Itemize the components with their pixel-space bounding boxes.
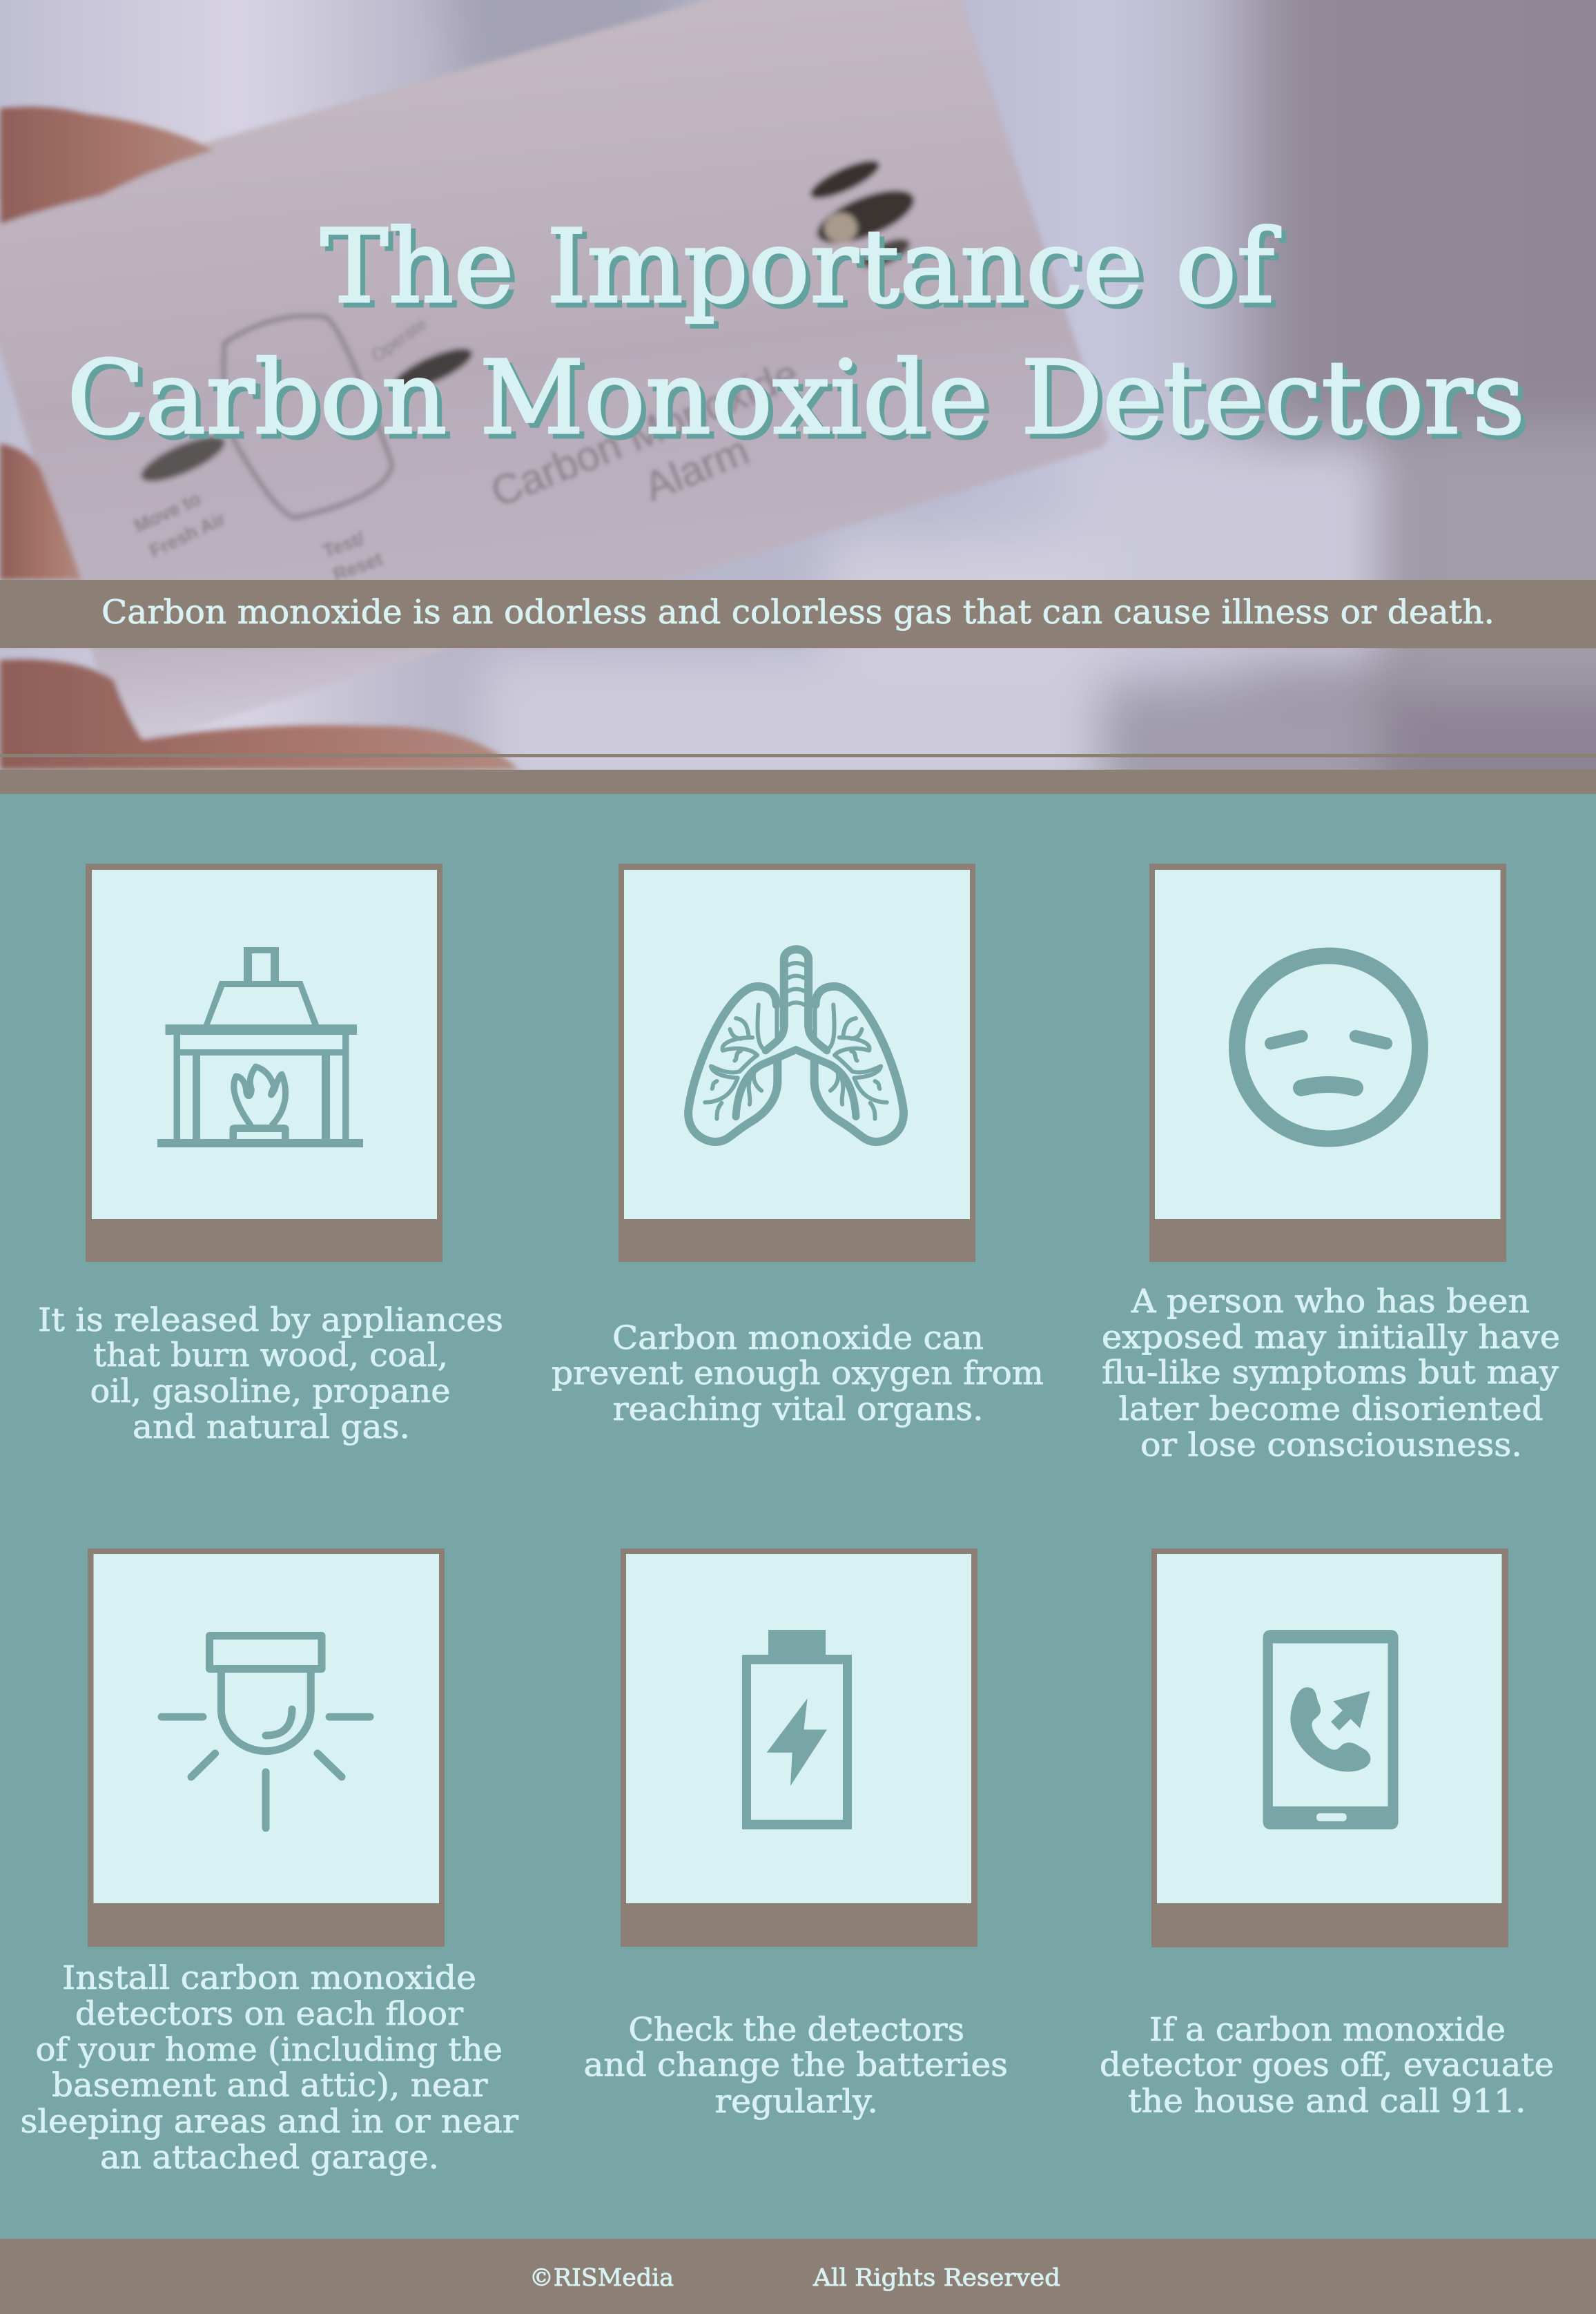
- hero photo: hand holding carbon monoxide alarm: Fresh Air: [146, 508, 229, 561]
- text: install: basement and attic), near: [52, 2067, 488, 2104]
- text: symptoms: exposed may initially have: [1102, 1319, 1560, 1357]
- title: The Importance of: [320, 208, 1281, 326]
- text: batteries: regularly.: [715, 2083, 878, 2121]
- text: symptoms: [1102, 1283, 1560, 1464]
- text: appliances: oil, gasoline, propane: [90, 1372, 450, 1410]
- footer: [0, 2239, 1596, 2314]
- subtitle band: Carbon monoxide is an odorless and colorless gas that can cause illness or death.: [101, 593, 1495, 632]
- text: appliances: [38, 1301, 503, 1446]
- text: oxygen: [552, 1319, 1044, 1428]
- text: install: of your home (including the: [36, 2031, 503, 2069]
- panel: phone: [1151, 1548, 1508, 1947]
- text: appliances: that burn wood, coal,: [93, 1336, 448, 1374]
- icon: sick face: [1237, 955, 1420, 1139]
- panel: fireplace: [86, 864, 442, 1262]
- text: symptoms: or lose consciousness.: [1140, 1426, 1522, 1464]
- text: evacuate: detector goes off, evacuate: [1100, 2046, 1554, 2084]
- text: batteries: Check the detectors: [628, 2011, 964, 2049]
- icon: fireplace: [157, 947, 363, 1147]
- icon: ceiling detector: [162, 1636, 370, 1828]
- text: appliances: It is released by appliances: [38, 1301, 503, 1339]
- panel: sick face: [1149, 864, 1506, 1262]
- title: Carbon Monoxide Detectors: [67, 339, 1525, 457]
- hero photo: hand holding carbon monoxide alarm: Test/: [320, 527, 367, 562]
- text: install: [21, 1959, 519, 2177]
- hero photo: hand holding carbon monoxide alarm: Carbon Monoxide: [485, 351, 805, 516]
- icon: lungs: [688, 949, 904, 1142]
- text: batteries: [584, 2011, 1008, 2121]
- panel: lungs: [619, 864, 975, 1262]
- hero photo: hand holding carbon monoxide alarm: Move to: [131, 488, 204, 536]
- hero photo: hand holding carbon monoxide alarm: Alarm: [638, 427, 755, 510]
- title: [67, 208, 1525, 457]
- text: oxygen: Carbon monoxide can: [612, 1319, 984, 1357]
- footer: All Rights Reserved: [812, 2264, 1060, 2292]
- text: oxygen: prevent enough oxygen from: [552, 1354, 1044, 1392]
- hero photo: hand holding carbon monoxide alarm: Reset: [331, 548, 385, 585]
- icon: battery: [742, 1630, 852, 1829]
- brown band above content: [0, 770, 1596, 794]
- text: install: detectors on each floor: [75, 1995, 464, 2033]
- footer: ©RISMedia: [529, 2264, 674, 2292]
- hero photo: hand holding carbon monoxide alarm: [0, 0, 1596, 770]
- text: evacuate: the house and call 911.: [1128, 2082, 1526, 2121]
- text: symptoms: later become disoriented: [1118, 1390, 1544, 1428]
- text: evacuate: [1100, 2011, 1554, 2121]
- text: evacuate: If a carbon monoxide: [1149, 2011, 1506, 2049]
- subtitle band: [0, 580, 1596, 648]
- thin divider line: [0, 754, 1596, 757]
- text: symptoms: A person who has been: [1131, 1283, 1530, 1321]
- panel: battery: [621, 1548, 977, 1947]
- text: oxygen: reaching vital organs.: [613, 1390, 983, 1428]
- text: batteries: and change the batteries: [584, 2046, 1008, 2084]
- icon: phone call: [1263, 1630, 1399, 1829]
- text: install: Install carbon monoxide: [62, 1959, 476, 1997]
- text: install: sleeping areas and in or near: [21, 2103, 519, 2141]
- text: symptoms: flu-like symptoms but may: [1102, 1354, 1559, 1392]
- text: appliances: and natural gas.: [133, 1408, 410, 1446]
- text: install: an attached garage.: [100, 2139, 439, 2177]
- hero photo: hand holding carbon monoxide alarm: Operate: [368, 314, 430, 366]
- panel: detector: [88, 1548, 445, 1947]
